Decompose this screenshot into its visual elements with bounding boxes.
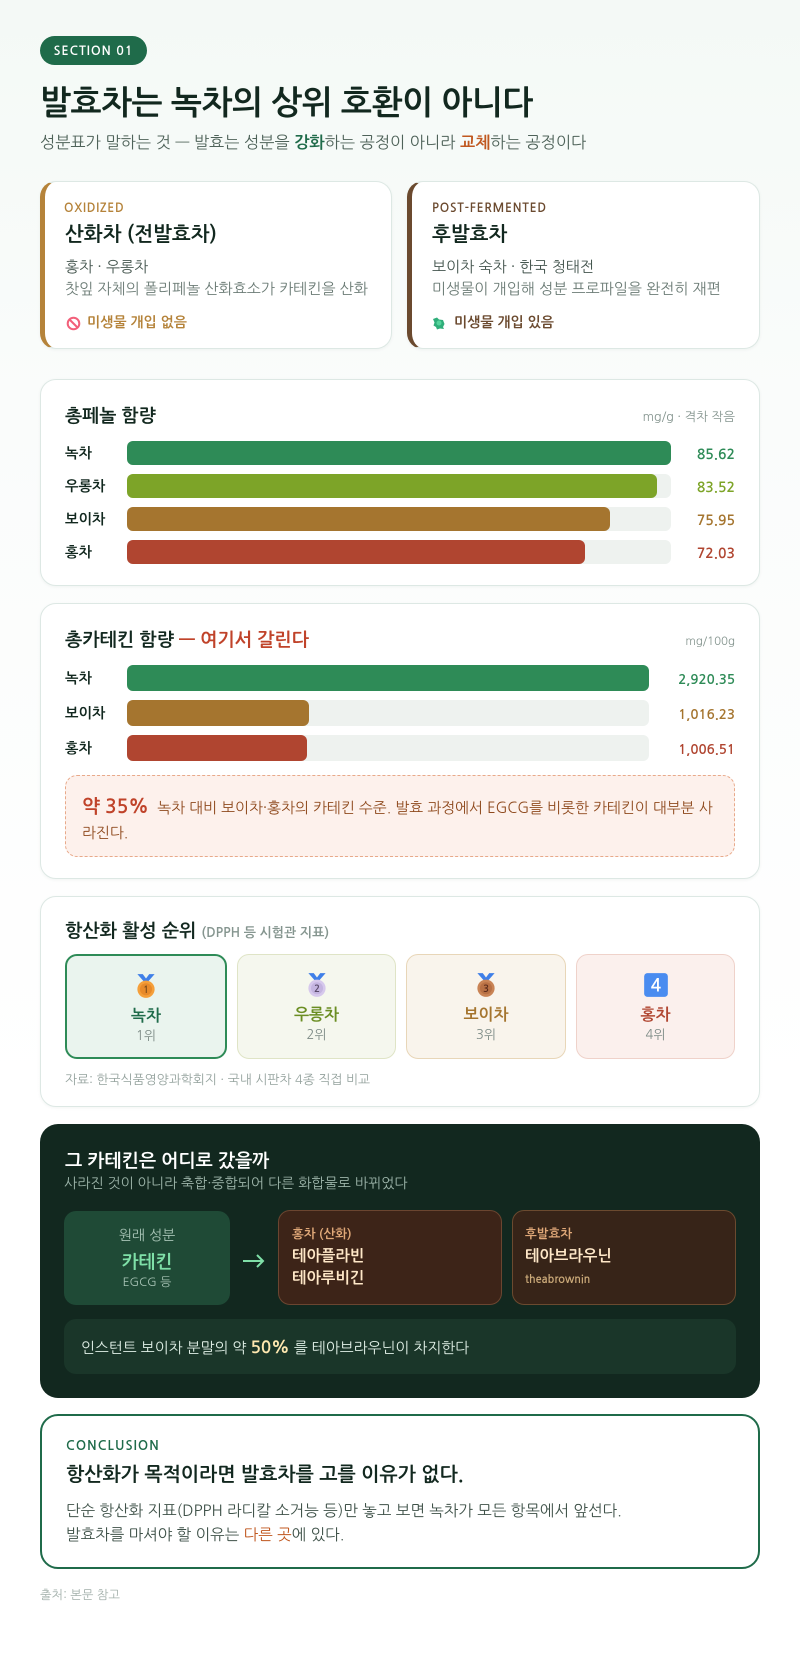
rank: 3위 (476, 1028, 496, 1041)
panel: antioxidant ranking (40, 896, 760, 1107)
heading: total phenol: 총페놀 함량 (65, 407, 156, 425)
microbe tag: none: 미생물 개입 없음 (87, 316, 187, 330)
icon: gold medal (137, 974, 155, 998)
latin name: theabrownin (525, 1274, 590, 1285)
panel: total phenol chart (40, 379, 760, 586)
stat bar: 50 percent (64, 1319, 736, 1374)
value: 2,920.35 (678, 673, 735, 686)
rank: 1위 (136, 1029, 156, 1042)
value: 83.52 (697, 481, 735, 495)
bar: black tea (127, 735, 649, 761)
caption: 후발효차 (525, 1227, 572, 1240)
conclusion body: 단순 항산화 지표(DPPH 라디칼 소거능 등)만 놓고 보면 녹차가 모든 항목에서 앞선다. (66, 1504, 622, 1519)
compound: 테아브라우닌 (525, 1249, 612, 1264)
description: 찻잎 자체의 폴리페놀 산화효소가 카테킨을 산화 (65, 282, 368, 297)
microbe tag: present: 미생물 개입 있음 (454, 316, 554, 330)
section badge (40, 36, 147, 65)
box: black tea products (278, 1210, 502, 1305)
conclusion heading: 항산화가 목적이라면 발효차를 고를 이유가 없다. (66, 1465, 464, 1484)
tea name: 우롱차 (294, 1008, 339, 1023)
panel: conclusion (40, 1414, 760, 1569)
catechin name: 카테킨 (122, 1253, 172, 1271)
heading: post-fermented tea: 후발효차 (432, 224, 507, 244)
callout: 35 percent: 라진다. (82, 826, 128, 841)
value: 85.62 (697, 448, 735, 462)
row label: 녹차 (65, 672, 92, 686)
bar: green tea (127, 665, 649, 691)
box: post-fermented products (512, 1210, 736, 1305)
tea name: 녹차 (131, 1009, 161, 1024)
row label: 녹차 (65, 447, 92, 461)
heading: total catechin: 총카테킨 함량 — 여기서 갈린다 (65, 631, 309, 649)
compounds (292, 1248, 364, 1286)
label: conclusion: CONCLUSION (66, 1439, 160, 1452)
tea types: 홍차 · 우롱차 (65, 260, 148, 275)
source note: 자료: 한국식품영양과학회지 · 국내 시판차 4종 직접 비교 (65, 1073, 370, 1086)
value: 1,006.51 (678, 743, 735, 756)
row label: 우롱차 (65, 480, 105, 494)
bar: black tea (127, 540, 671, 564)
row label: 보이차 (65, 513, 105, 527)
label: post-fermented: POST-FERMENTED (432, 202, 547, 214)
callout: 35 percent: 약 35% 녹차 대비 보이차·홍차의 카테킨 수준. 발효 과정에서 EGCG를 비롯한 카테킨이 대부분 사 (82, 797, 713, 816)
tea name: 홍차 (640, 1008, 671, 1023)
bar: pu-erh (127, 507, 671, 531)
bar: green tea (127, 441, 671, 465)
conclusion body: 발효차를 마셔야 할 이유는 다른 곳에 있다. (66, 1528, 344, 1543)
heading: oxidized tea: 산화차 (전발효차) (65, 224, 217, 244)
value: 75.95 (697, 514, 735, 528)
value: 72.03 (697, 547, 735, 561)
heading: where catechins went: 그 카테킨은 어디로 갔을까 (65, 1152, 269, 1170)
row label: 홍차 (65, 546, 92, 560)
subtitle: 성분표가 말하는 것 — 발효는 성분을 강화하는 공정이 아니라 교체하는 공정이다 (40, 135, 586, 151)
callout: 35 percent (65, 775, 735, 857)
icon: prohibited (66, 316, 80, 330)
tea name: 보이차 (463, 1008, 509, 1023)
label: oxidized: OXIDIZED (64, 202, 125, 214)
caption: 원래 성분 (119, 1229, 175, 1243)
unit note: mg/100g (685, 635, 735, 647)
heading: antioxidant ranking: 항산화 활성 순위 (DPPH 등 시험관 지표) (65, 922, 329, 940)
icon: number four: 4 (650, 977, 661, 994)
rank: 4위 (645, 1028, 666, 1041)
EGCG note: EGCG 등 (123, 1276, 171, 1288)
compounds: 테아루비긴 (292, 1271, 364, 1286)
tea types: 보이차 숙차 · 한국 청태전 (432, 260, 594, 275)
bar: oolong (127, 474, 671, 498)
section badge: SECTION 01 (54, 44, 133, 57)
rank tile: green tea (65, 954, 227, 1059)
row label: 보이차 (65, 707, 105, 721)
rank tile: pu-erh (406, 954, 566, 1059)
rank tile: black tea (576, 954, 735, 1059)
conclusion body (66, 1503, 622, 1543)
bar: pu-erh (127, 700, 649, 726)
icon: silver medal: 2 (314, 984, 319, 994)
panel: total catechin chart (40, 603, 760, 879)
footer source: 출처: 본문 참고 (40, 1588, 120, 1601)
rank: 2위 (306, 1028, 327, 1041)
description: 미생물이 개입해 성분 프로파일을 완전히 재편 (432, 282, 721, 297)
icon: bronze medal: 3 (483, 984, 489, 994)
panel: post-fermented tea (407, 181, 760, 349)
unit note: mg/g · 격차 작음 (643, 410, 735, 423)
panel: oxidized tea (40, 181, 392, 349)
value: 1,016.23 (678, 708, 735, 721)
icon: bronze medal (477, 973, 495, 997)
compounds: 테아플라빈 (292, 1249, 364, 1264)
panel: where catechins went (40, 1124, 760, 1398)
title: 발효차는 녹차의 상위 호환이 아니다 (40, 86, 533, 119)
arrow (243, 1254, 264, 1268)
icon: gold medal: 1 (143, 985, 149, 995)
icon: microbe (433, 318, 444, 330)
stat bar: 50 percent: 인스턴트 보이차 분말의 약 50% 를 테아브라우닌이 차지한다 (81, 1339, 469, 1356)
icon: number four (644, 973, 668, 997)
icon: silver medal (308, 973, 326, 997)
box: original catechin (64, 1211, 230, 1305)
sub heading: 사라진 것이 아니라 축합·중합되어 다른 화합물로 바뀌었다 (64, 1177, 407, 1191)
caption: 홍차 (산화) (292, 1227, 352, 1240)
row label: 홍차 (65, 742, 92, 756)
rank tile: oolong (237, 954, 396, 1059)
